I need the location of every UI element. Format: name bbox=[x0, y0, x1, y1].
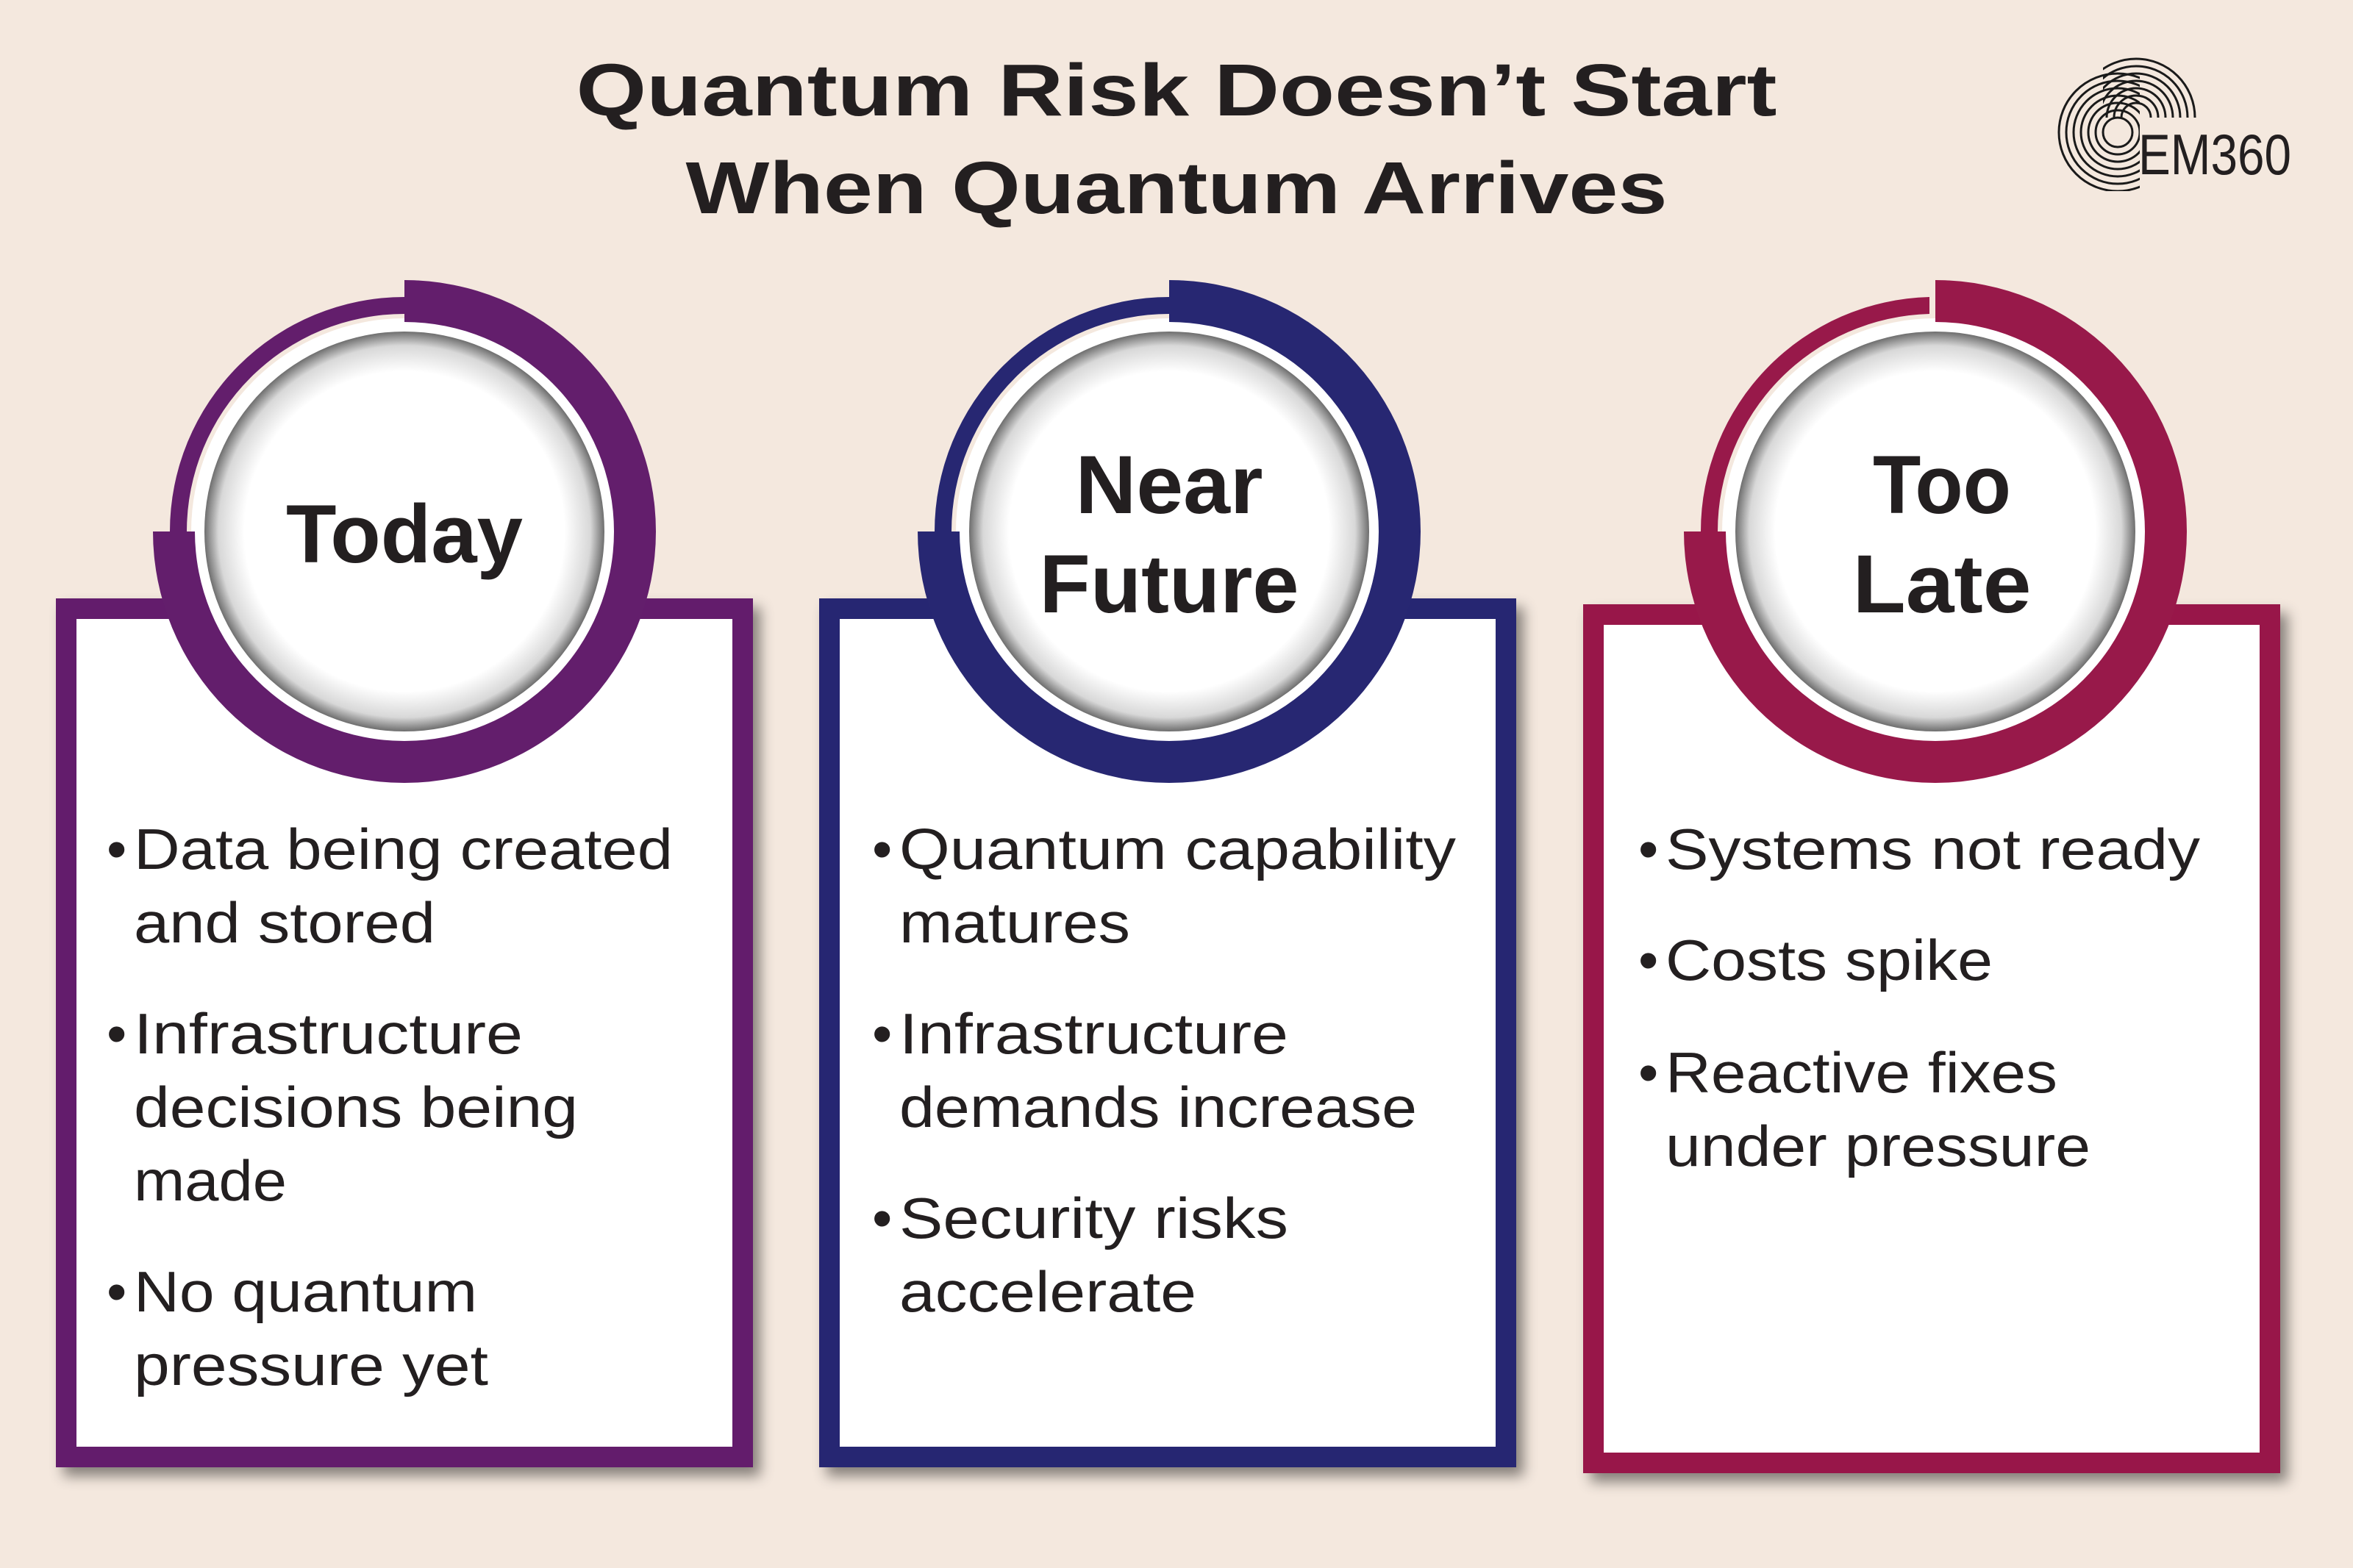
bullets: too late: • bbox=[1638, 817, 1658, 881]
panel: too late bbox=[1593, 280, 2270, 1463]
bullets: too late: Costs spike bbox=[1665, 928, 1993, 992]
bullets: today: made bbox=[134, 1148, 287, 1213]
bullets: today: • bbox=[107, 1001, 126, 1066]
bullets: too late: Reactive fixes bbox=[1665, 1040, 2057, 1105]
heading: too late bbox=[1853, 439, 2031, 630]
bullets: near future bbox=[872, 817, 1456, 1324]
ring: too late bbox=[1684, 280, 2187, 783]
heading: near future: Future bbox=[1040, 538, 1299, 630]
card: too late bbox=[1593, 615, 2270, 1463]
title: Quantum Risk Doesn’t Start bbox=[576, 49, 1777, 132]
bullets: near future: matures bbox=[899, 890, 1130, 955]
heading: too late: Too bbox=[1873, 439, 2011, 531]
bullets: too late bbox=[1638, 817, 2200, 1178]
heading: near future: Near bbox=[1075, 439, 1263, 531]
bullets: near future: • bbox=[872, 817, 892, 881]
bullets: near future: Infrastructure bbox=[899, 1001, 1288, 1066]
bullets: today: decisions being bbox=[134, 1075, 578, 1139]
heading: today: Today bbox=[286, 488, 523, 580]
bullets: today: • bbox=[107, 817, 126, 881]
logo: EM360 bbox=[2059, 59, 2291, 191]
bullets: too late: under pressure bbox=[1665, 1114, 2090, 1178]
bullets: too late: • bbox=[1638, 928, 1658, 992]
logo: EM360: EM360 bbox=[2138, 122, 2291, 187]
bullets: today: pressure yet bbox=[134, 1333, 488, 1397]
bullets: today: and stored bbox=[134, 890, 435, 955]
bullets: today: • bbox=[107, 1259, 126, 1324]
bullets: too late: • bbox=[1638, 1040, 1658, 1105]
ring: today bbox=[153, 280, 656, 783]
bullets: today: Infrastructure bbox=[134, 1001, 523, 1066]
bullets: too late: Systems not ready bbox=[1665, 817, 2200, 881]
title: When Quantum Arrives bbox=[685, 147, 1668, 229]
bullets: near future: • bbox=[872, 1186, 892, 1250]
bullets: near future: • bbox=[872, 1001, 892, 1066]
bullets: today bbox=[107, 817, 673, 1397]
heading: near future bbox=[1040, 439, 1299, 630]
ring: near future bbox=[918, 280, 1421, 783]
panel: today bbox=[66, 280, 743, 1457]
bullets: near future: demands increase bbox=[899, 1075, 1417, 1139]
title bbox=[576, 49, 1777, 229]
bullets: today: Data being created bbox=[134, 817, 673, 881]
bullets: near future: Security risks bbox=[899, 1186, 1288, 1250]
bullets: today: No quantum bbox=[134, 1259, 477, 1324]
bullets: near future: accelerate bbox=[899, 1259, 1196, 1324]
card: near future bbox=[829, 609, 1506, 1457]
panel: near future bbox=[829, 280, 1506, 1457]
bullets: near future: Quantum capability bbox=[899, 817, 1456, 881]
card: today bbox=[66, 609, 743, 1457]
heading: too late: Late bbox=[1853, 538, 2031, 630]
